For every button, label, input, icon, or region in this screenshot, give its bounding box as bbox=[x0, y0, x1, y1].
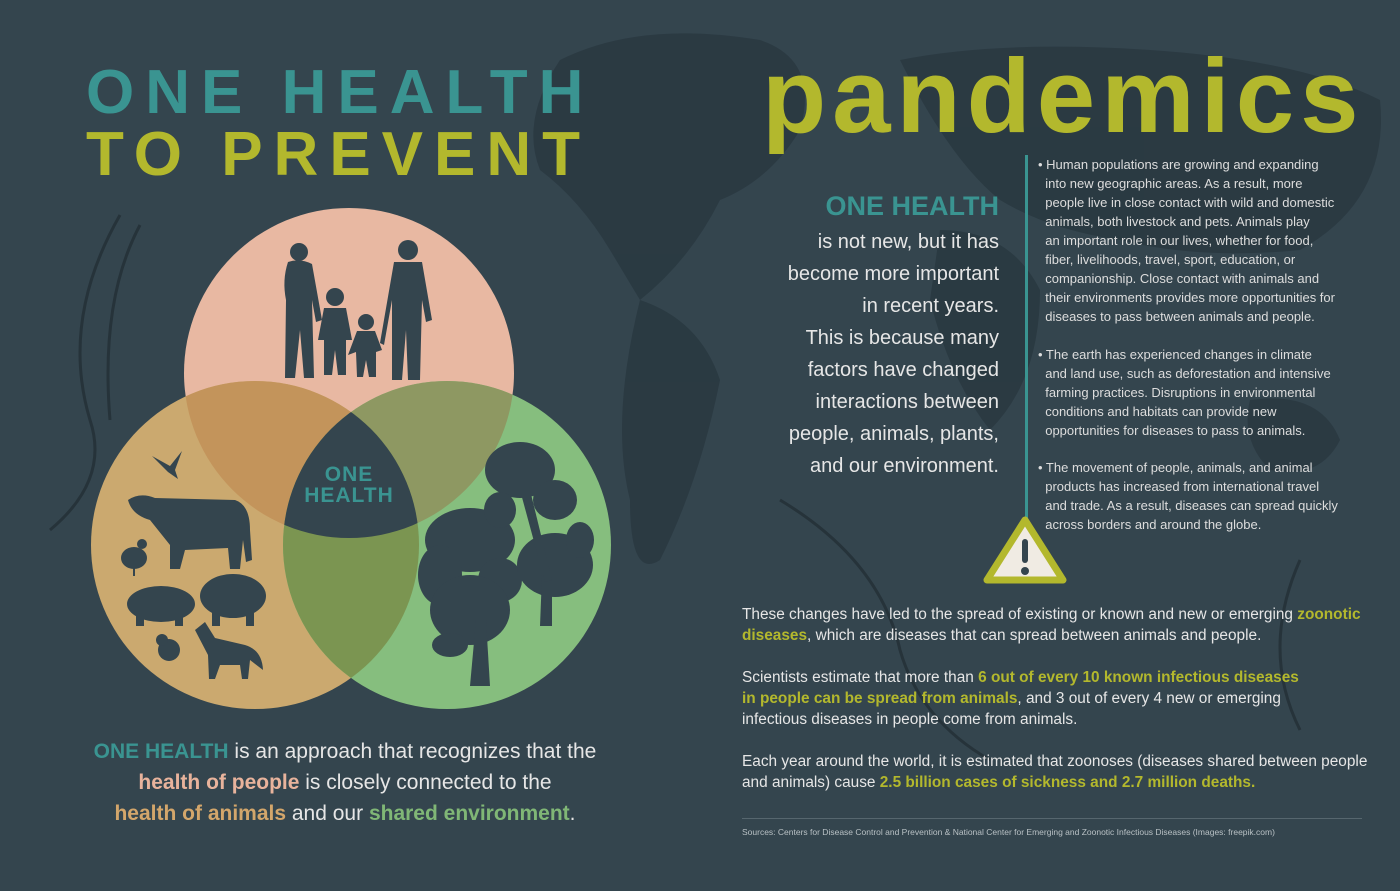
factor bullets: across borders and around the globe. bbox=[1045, 517, 1261, 532]
factor bullets: conditions and habitats can provide new bbox=[1045, 404, 1276, 419]
zoonotic facts text: These changes have led to the spread of existing or known and new or emerging zoonotic bbox=[742, 606, 1361, 623]
bottom-left definition text: health of people is closely connected to the bbox=[138, 771, 552, 794]
silhouettes: family bbox=[284, 240, 432, 380]
silhouettes: animals bbox=[121, 451, 266, 679]
factor bullets: opportunities for diseases to pass to animals. bbox=[1045, 423, 1305, 438]
title: one health to prevent bbox=[86, 58, 594, 189]
title: pandemics: pandemics bbox=[762, 38, 1365, 155]
venn center label: ONE bbox=[325, 463, 373, 486]
factor bullets: their environments provides more opportunities for bbox=[1045, 290, 1335, 305]
zoonotic facts text bbox=[742, 606, 1367, 791]
title: one health to prevent: ONE HEALTH bbox=[86, 58, 594, 127]
intro statement: in recent years. bbox=[862, 295, 999, 317]
factor bullets: farming practices. Disruptions in environmental bbox=[1045, 385, 1315, 400]
zoonotic facts text: diseases, which are diseases that can spread between animals and people. bbox=[742, 627, 1261, 644]
venn diagram bbox=[91, 208, 611, 709]
intro statement: and our environment. bbox=[810, 455, 999, 477]
zoonotic facts text: and animals) cause 2.5 billion cases of sickness and 2.7 million deaths. bbox=[742, 774, 1255, 791]
zoonotic facts text: Scientists estimate that more than 6 out of every 10 known infectious diseases bbox=[742, 669, 1299, 686]
factor bullets: • The movement of people, animals, and animal bbox=[1038, 460, 1313, 475]
venn center label bbox=[304, 463, 394, 507]
factor bullets: people live in close contact with wild and domestic bbox=[1045, 195, 1334, 210]
title: one health to prevent: TO PREVENT bbox=[86, 120, 591, 189]
factor bullets: animals, both livestock and pets. Animals play bbox=[1045, 214, 1310, 229]
silhouettes: trees bbox=[418, 442, 594, 686]
zoonotic facts text: in people can be spread from animals, and 3 out of every 4 new or emerging bbox=[742, 690, 1281, 707]
icon: warning triangle bbox=[984, 516, 1066, 584]
intro statement: interactions between bbox=[816, 391, 999, 413]
factor bullets: and trade. As a result, diseases can spread quickly bbox=[1045, 498, 1338, 513]
zoonotic facts text: infectious diseases in people come from animals. bbox=[742, 711, 1077, 728]
intro statement: factors have changed bbox=[808, 359, 999, 381]
intro statement bbox=[788, 191, 999, 477]
intro statement: This is because many bbox=[806, 327, 999, 349]
zoonotic facts text: Each year around the world, it is estimated that zoonoses (diseases shared between people bbox=[742, 753, 1367, 770]
factor bullets bbox=[1038, 157, 1338, 532]
sources bbox=[742, 818, 1362, 837]
intro statement: ONE HEALTH bbox=[826, 191, 999, 221]
bottom-left definition text bbox=[94, 740, 596, 825]
factor bullets: • Human populations are growing and expanding bbox=[1038, 157, 1319, 172]
bottom-left definition text: health of animals and our shared environment. bbox=[114, 802, 576, 825]
intro statement: become more important bbox=[788, 263, 999, 285]
intro statement: people, animals, plants, bbox=[789, 423, 999, 445]
timeline line bbox=[1025, 155, 1028, 525]
venn center label: HEALTH bbox=[304, 484, 394, 507]
factor bullets: products has increased from international travel bbox=[1045, 479, 1319, 494]
factor bullets: and land use, such as deforestation and intensive bbox=[1045, 366, 1331, 381]
factor bullets: an important role in our lives, whether for food, bbox=[1045, 233, 1313, 248]
factor bullets: • The earth has experienced changes in climate bbox=[1038, 347, 1312, 362]
sources: Sources: Centers for Disease Control and Prevention & National Center for Emerging and Zoonotic Infectious Diseases (Images: freepik.com) bbox=[742, 827, 1275, 837]
factor bullets: diseases to pass between animals and people. bbox=[1045, 309, 1315, 324]
bottom-left definition text: ONE HEALTH is an approach that recognizes that the bbox=[94, 740, 596, 763]
factor bullets: into new geographic areas. As a result, more bbox=[1045, 176, 1302, 191]
factor bullets: fiber, livelihoods, travel, sport, education, or bbox=[1045, 252, 1295, 267]
factor bullets: companionship. Close contact with animals and bbox=[1045, 271, 1319, 286]
intro statement: is not new, but it has bbox=[818, 231, 999, 253]
